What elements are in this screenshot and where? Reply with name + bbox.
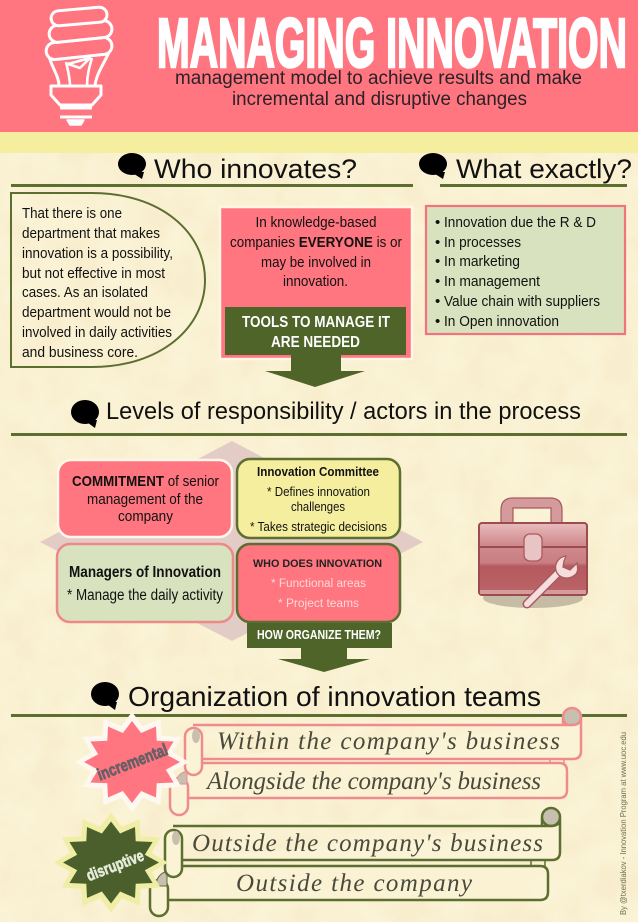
panel: isolated department: That there is one (22, 205, 122, 222)
callout: how organize them: HOW ORGANIZE THEM? (257, 627, 381, 642)
panel: who does innovation: * Project teams (278, 598, 359, 610)
icon: speech bubble (419, 153, 447, 179)
panel: what exactly list: • (435, 273, 440, 290)
panel: what exactly list: • (435, 234, 440, 251)
panel: what exactly list: In marketing (444, 253, 520, 270)
panel: isolated department: department would not be (22, 304, 171, 321)
heading: what exactly: What exactly? (456, 154, 632, 184)
panel: what exactly list: • (435, 293, 440, 310)
arrow: organize down (278, 648, 370, 672)
heading: levels of responsibility: Levels of responsibility / actors in the process (106, 398, 581, 425)
panel: innovation committee: * Takes strategic decisions (250, 519, 387, 534)
heading: organization of innovation teams: Organization of innovation teams (128, 681, 541, 712)
icon: speech bubble (91, 682, 119, 710)
panel: commitment: company (118, 508, 173, 525)
panel: innovation committee: Innovation Committee (257, 464, 379, 479)
badge: incremental: incremental (95, 740, 170, 784)
badge: disruptive: disruptive (84, 848, 147, 885)
scroll: within business (185, 708, 581, 775)
header banner (0, 0, 638, 153)
panel: what exactly list (426, 206, 625, 334)
panel: everyone involved (220, 207, 412, 359)
panel: what exactly list: • (435, 313, 440, 330)
panel: isolated department: involved in daily activities (22, 324, 172, 341)
scroll: within business: Within the company's business (217, 728, 560, 755)
subtitle (175, 68, 582, 110)
panel: isolated department: innovation is a possibility, (22, 245, 173, 262)
panel: what exactly list: In processes (444, 234, 521, 251)
panel: innovation committee: * Defines innovation (267, 484, 370, 499)
callout: tools needed (225, 307, 406, 355)
arrow: tools down (265, 355, 365, 387)
panel: isolated department: but not effective in most (22, 265, 166, 282)
panel: everyone involved: In knowledge-based (256, 214, 376, 231)
panel: what exactly list: Innovation due the R & D (444, 214, 596, 231)
panel: commitment (58, 460, 232, 537)
scroll: outside the company: Outside the company (236, 870, 473, 897)
panel: isolated department: department that makes (22, 225, 160, 242)
panel: what exactly list: • (435, 253, 440, 270)
panel: managers of innovation: Managers of Innovation (69, 564, 221, 581)
subtitle: incremental and disruptive changes (232, 89, 527, 110)
panel: commitment: management of the (87, 491, 203, 508)
panel: commitment: COMMITMENT of senior (72, 473, 219, 490)
panel: what exactly list: • (435, 214, 440, 231)
icon: toolbox (479, 498, 587, 608)
icon: speech bubble (71, 400, 99, 428)
panel: managers of innovation (57, 544, 233, 622)
panel: everyone involved: may be involved in (261, 254, 371, 271)
badge: disruptive (54, 812, 168, 912)
panel: isolated department (11, 193, 205, 367)
panel: everyone involved: companies EVERYONE is or (230, 234, 402, 251)
panel: innovation committee: challenges (291, 499, 345, 514)
panel: innovation committee (237, 459, 400, 538)
callout: how organize them (247, 623, 392, 648)
panel: who does innovation (237, 544, 400, 622)
subtitle: management model to achieve results and make (175, 68, 582, 89)
scroll: outside business: Outside the company's business (192, 830, 543, 857)
panel: what exactly list: In management (444, 273, 541, 290)
panel: isolated department: and business core. (22, 344, 138, 361)
callout: tools needed: TOOLS TO MANAGE IT (242, 314, 390, 331)
panel: who does innovation: WHO DOES INNOVATION (253, 558, 382, 570)
callout: tools needed: ARE NEEDED (271, 334, 360, 351)
panel: everyone involved: innovation. (283, 273, 348, 290)
icon: light bulb (45, 7, 113, 125)
panel: what exactly list: In Open innovation (444, 313, 559, 330)
panel: what exactly list: Value chain with suppliers (444, 293, 600, 310)
scroll: outside the company (150, 860, 548, 916)
panel: isolated department: cases. As an isolated (22, 284, 148, 301)
credit: vertical byline: By @txerdiakov - Innovation Program at www.uoc.edu (619, 732, 628, 915)
panel: who does innovation: * Functional areas (271, 578, 366, 590)
scroll: alongside business (170, 757, 567, 815)
scroll: alongside business: Alongside the company's business (205, 768, 541, 795)
panel: managers of innovation: * Manage the daily activity (67, 587, 223, 604)
icon: speech bubble (118, 153, 146, 179)
scroll: outside business (165, 808, 560, 877)
heading: who innovates: Who innovates? (154, 154, 357, 184)
diamond background (40, 441, 423, 641)
badge: incremental (75, 712, 189, 812)
